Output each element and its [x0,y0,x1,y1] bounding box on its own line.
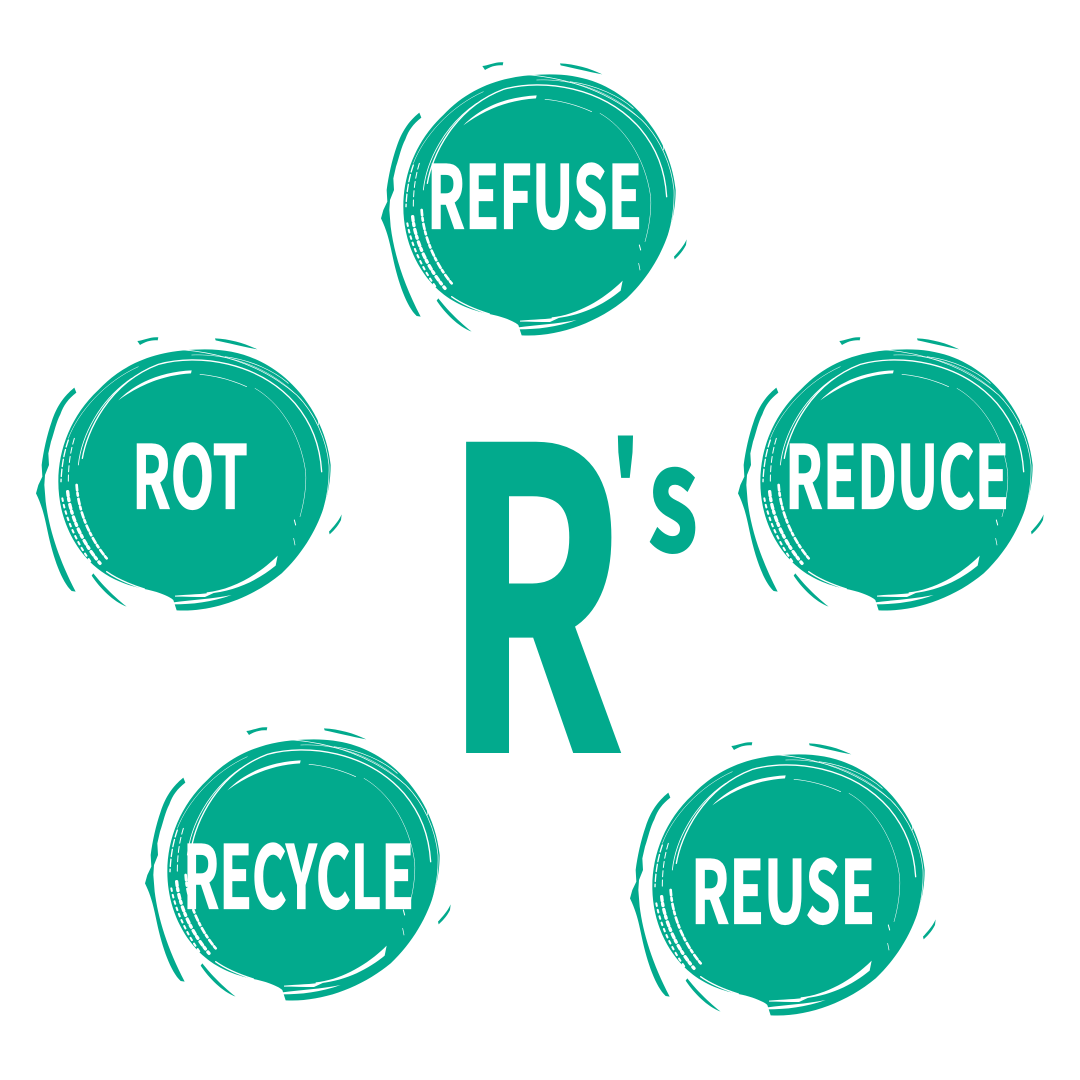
badge: RECYCLE: RECYCLE [183,808,414,934]
badge: REDUCE [738,337,1044,611]
badge: ROT: ROT [132,408,248,534]
central heading: R's: ' [610,391,641,561]
central heading: R's: R [444,272,624,869]
badge: REUSE [630,742,936,1016]
central heading: R's: s [648,383,698,593]
badge: ROT [36,337,342,611]
badge: REUSE: REUSE [691,824,875,950]
badge: REFUSE: REFUSE [427,128,642,254]
badge: REFUSE [381,62,687,336]
badge: RECYCLE [145,727,451,1001]
